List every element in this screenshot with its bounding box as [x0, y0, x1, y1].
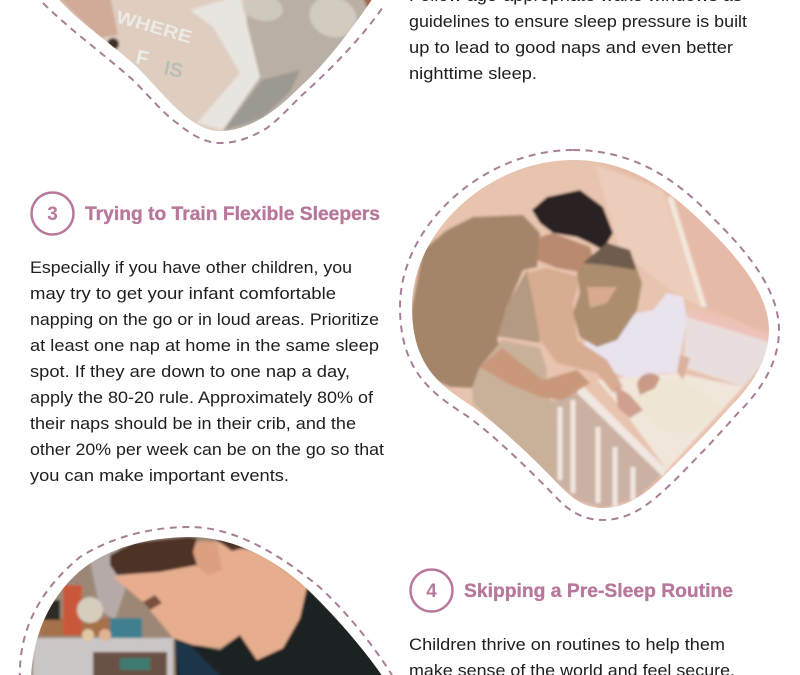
step 4 badge: 4 — [426, 581, 437, 602]
step 3 body text: apply the 80-20 rule. Approximately 80% of — [30, 388, 373, 407]
step 3 body text: may try to get your infant comfortable — [30, 284, 336, 303]
step 3 body text: at least one nap at home in the same sleep — [30, 336, 379, 355]
step 3 body text: their naps should be in their crib, and the — [30, 414, 356, 433]
step 3 badge: 3 — [47, 204, 58, 225]
step 4 body text: Children thrive on routines to help them — [409, 635, 725, 654]
step 4 heading: Skipping a Pre-Sleep Routine — [464, 581, 733, 602]
body text: step 2 continuation: guidelines to ensure sleep pressure is built — [409, 12, 747, 31]
step 3 heading: Trying to Train Flexible Sleepers — [85, 204, 380, 225]
step 3 body text: napping on the go or in loud areas. Prioritize — [30, 310, 379, 329]
step 4 body text — [409, 635, 735, 675]
step 3 body text: you can make important events. — [30, 466, 289, 485]
step 3 body text — [30, 258, 384, 485]
body text: step 2 continuation: up to lead to good naps and even better — [409, 38, 733, 57]
photo lettering: where: WHERE — [114, 7, 194, 47]
step 3 body text: Especially if you have other children, you — [30, 258, 352, 277]
photo: woman looking down blob — [20, 527, 400, 675]
body text: step 2 continuation: nighttime sleep. — [409, 64, 537, 83]
step 4 badge — [410, 570, 452, 612]
photo: parents over crib blob — [400, 150, 780, 520]
step 3 badge — [32, 192, 74, 234]
step 3 body text: other 20% per week can be on the go so that — [30, 440, 384, 459]
body text: step 2 continuation — [409, 0, 747, 83]
photo: baby clothes blob — [40, 0, 390, 143]
step 3 body text: spot. If they are down to one nap a day, — [30, 362, 350, 381]
photo lettering: is: IS — [162, 57, 185, 83]
photo lettering: f: F — [134, 46, 150, 70]
